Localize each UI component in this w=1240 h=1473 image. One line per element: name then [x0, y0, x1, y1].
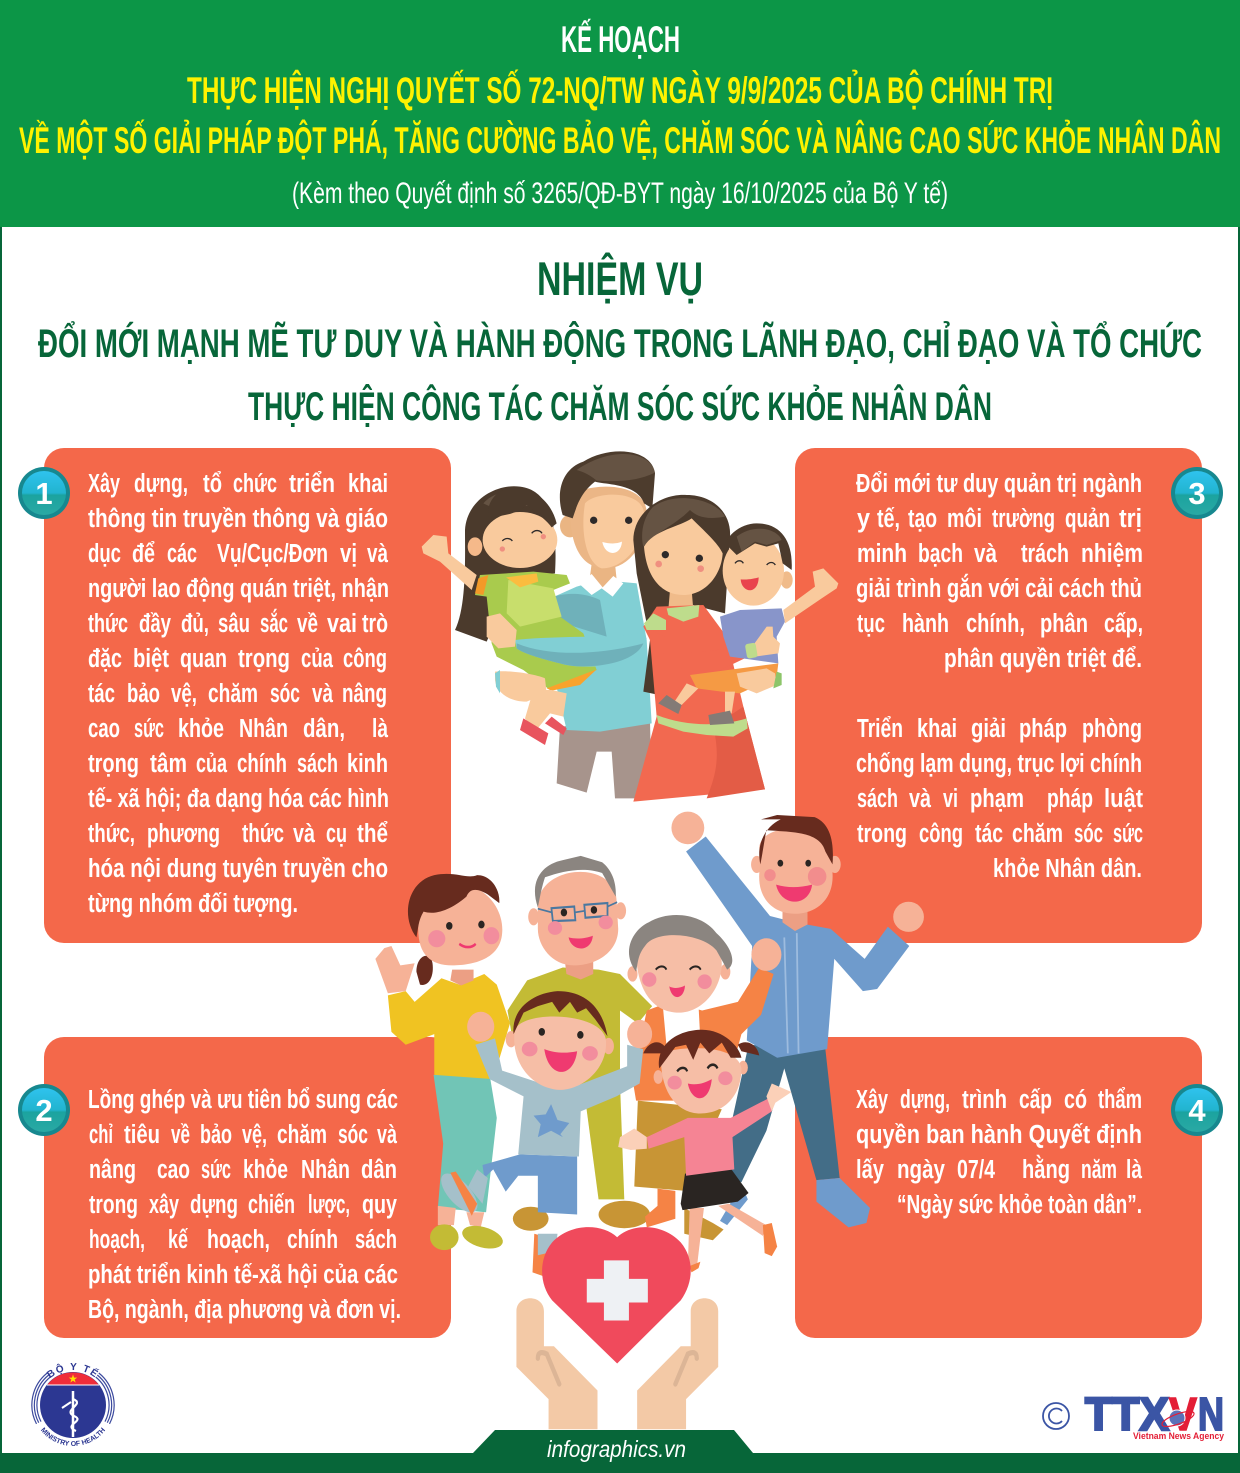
boy — [658, 523, 838, 725]
panel 2 text: sóc — [338, 1121, 368, 1149]
panel 3 text: pháp — [1047, 785, 1093, 813]
panel 2 text: nâng — [89, 1156, 136, 1184]
logo: TTXVN with copyright: Vietnam News Agency — [1133, 1431, 1224, 1441]
panel 4 text: Xây — [856, 1086, 889, 1114]
illustration: family of four hugging — [422, 451, 838, 802]
panel 1 text: phương — [147, 820, 220, 848]
panel 1 text: nâng — [342, 680, 387, 708]
panel 1 text: để — [132, 540, 155, 568]
panel 1 text: Nhân — [239, 715, 288, 743]
panel 4 text: 07/4 — [957, 1156, 996, 1184]
panel 2 text: và — [377, 1121, 398, 1149]
heart with cross — [542, 1227, 691, 1363]
panel 3 text: phân — [1040, 610, 1088, 638]
panel 3 text: sóc — [1074, 820, 1103, 848]
panel 2 text: tiêu — [124, 1121, 160, 1149]
panel 3 text: giải — [971, 715, 1006, 743]
panel 1 text: và — [293, 820, 316, 848]
badge 4 — [1171, 1084, 1223, 1136]
panel 1 text: hóa nội dung tuyên truyền cho — [88, 855, 388, 883]
panel 1 text: thức — [242, 820, 284, 848]
panel 1 text: tế- xã hội; đa dạng hóa các hình — [88, 785, 389, 813]
panel 2 text: chính — [287, 1226, 338, 1254]
panel 3 text: phân quyền triệt để. — [944, 645, 1142, 673]
logo top text: BỘ Y TẾ — [46, 1363, 100, 1378]
panel 1 text: về — [297, 610, 318, 638]
panel 1 text: sức — [134, 715, 164, 743]
panel 1 text: đặc — [88, 645, 122, 673]
panel 2 text: vệ, — [242, 1121, 267, 1149]
subtitle: decision reference: (Kèm theo Quyết định số 3265/QĐ-BYT ngày 16/10/2025 của Bộ Y tế) — [292, 177, 948, 210]
logo: TTXVN with copyright: TTX — [1085, 1388, 1169, 1440]
panel 2 text: chiến — [248, 1191, 295, 1219]
panel 2 text: khỏe — [243, 1156, 288, 1184]
panel 1 text: cao — [88, 715, 120, 743]
panel 1 text: sóc — [270, 680, 300, 708]
panel 3 text: luật — [1104, 785, 1143, 813]
panel 3 text: tục — [857, 610, 885, 638]
panel 2 text: chăm — [277, 1121, 327, 1149]
panel 1 — [44, 448, 451, 943]
panel 2 text: dựng — [190, 1191, 238, 1219]
panel 2 text: bảo — [200, 1121, 232, 1149]
panel 3 — [795, 448, 1202, 943]
panel 1 text: các — [167, 540, 197, 568]
grandmother — [627, 915, 781, 1240]
panel 3 text: công — [919, 820, 963, 848]
heading: plan: KẾ HOẠCH — [561, 19, 680, 60]
badge 3: 3 — [1188, 476, 1206, 511]
panel 3 text: và — [974, 540, 998, 568]
panel 1 text: Vụ/Cục/Đơn — [217, 540, 328, 568]
panel 3 text: chăm — [1012, 820, 1063, 848]
panel 1 text: chính — [237, 750, 287, 778]
panel 1 text: chăm — [208, 680, 258, 708]
panel 3 text: khai — [917, 715, 957, 743]
panel 2 text: chỉ — [89, 1121, 113, 1149]
panel 3 text: minh — [857, 540, 907, 568]
panel 3 text: tác — [975, 820, 1003, 848]
panel 2 text: quy — [362, 1191, 398, 1219]
panel 4 text: hằng — [1022, 1154, 1070, 1184]
panel 1 text: vị — [340, 540, 357, 568]
panel 1 text: của — [196, 750, 228, 778]
panel 3 text: tạo — [908, 505, 937, 533]
panel 3 text — [856, 470, 1143, 883]
panel 3 text: cấp, — [1104, 610, 1143, 638]
mother — [375, 874, 510, 1252]
logo: TTXVN with copyright: N — [1198, 1388, 1224, 1440]
section title — [38, 252, 1202, 429]
panel 2 text: sức — [201, 1156, 231, 1184]
panel 3 text: phòng — [1082, 715, 1142, 743]
illustration: three-generation family — [375, 812, 924, 1429]
panel 1 text: dựng, — [134, 470, 188, 498]
panel 3 text: pháp — [1019, 715, 1067, 743]
panel 1 text: thể — [357, 820, 388, 848]
panel 1 text: thức — [88, 610, 128, 638]
panel 2 text: về — [171, 1121, 190, 1149]
panel 4 text: năm — [1081, 1156, 1117, 1184]
panel 3 text: Triển — [857, 715, 903, 743]
panel 4 text: là — [1126, 1156, 1143, 1184]
panel 3 text: tế, — [877, 505, 900, 533]
footer bar — [0, 1430, 1240, 1473]
badge 3 — [1171, 467, 1223, 519]
panel 1 text: tâm — [150, 750, 187, 778]
logo: TTXVN with copyright: V — [1169, 1388, 1197, 1440]
panel 1 text: sâu — [218, 610, 250, 638]
panel 1 text: chức — [233, 470, 277, 498]
panel 4 text: lấy — [856, 1156, 885, 1184]
panel 2 text: kế — [168, 1226, 189, 1254]
panel 3 text: quản — [1065, 505, 1110, 533]
panel 4 — [795, 1037, 1202, 1338]
badge 4: 4 — [1188, 1093, 1206, 1128]
panel 2 text: sách — [355, 1226, 397, 1254]
footer site name: infographics.vn — [547, 1436, 686, 1462]
badge 1: 1 — [35, 476, 53, 511]
panel 3 text: trách — [1021, 540, 1069, 568]
panel 2 text — [88, 1086, 401, 1324]
caring hands — [516, 1298, 718, 1429]
panel 3 text: y — [857, 505, 871, 533]
panel 3 text: Đổi mới tư duy quản trị ngành — [856, 470, 1142, 498]
panel 3 text: môi — [947, 505, 982, 533]
father — [671, 812, 924, 1227]
logo: Ministry of Health — [31, 1363, 115, 1446]
panel 1 text: trọng — [88, 750, 139, 778]
panel 1 text: thức, — [88, 820, 135, 848]
panel 3 text: phạm — [970, 785, 1024, 813]
panel 4 text: thẩm — [1098, 1086, 1142, 1114]
panel 2 — [44, 1037, 451, 1338]
panel 3 text: chống lạm dụng, trục lợi chính — [856, 750, 1142, 778]
panel 1 text: triển — [289, 470, 335, 498]
panel 2 text: phát triển kinh tế-xã hội của các — [88, 1261, 398, 1289]
panel 1 text: tác — [88, 680, 115, 708]
panel 1 text: khỏe — [178, 715, 224, 743]
panel 1 text: bảo — [127, 680, 160, 708]
panel 4 text — [856, 1086, 1143, 1219]
title: task: NHIỆM VỤ — [537, 252, 703, 305]
girl — [618, 1030, 791, 1272]
panel 1 text: cụ — [326, 820, 347, 848]
copyright symbol — [1043, 1403, 1069, 1429]
panel 2 text: Nhân — [301, 1156, 350, 1184]
panel 3 text: hành — [902, 610, 949, 638]
panel 3 text: sức — [1113, 820, 1143, 848]
panel 1 text: và — [312, 680, 334, 708]
panel 2 text: xây — [149, 1191, 180, 1219]
panel 1 text: đầy — [139, 610, 172, 638]
badge 1 — [18, 467, 70, 519]
panel 3 text: nhiệm — [1081, 540, 1143, 568]
logo: Ministry of Health: ★ — [68, 1374, 78, 1384]
panel 2 text: Lồng ghép và ưu tiên bổ sung các — [88, 1086, 398, 1114]
panel 2 text: lược, — [308, 1191, 350, 1219]
panel 1 text: Xây — [88, 470, 121, 498]
man — [547, 451, 655, 798]
panel 1 text: thông tin truyền thông và giáo — [88, 505, 388, 533]
panel 1 text: đủ, — [181, 610, 209, 638]
panel 4 text: “Ngày sức khỏe toàn dân”. — [897, 1191, 1142, 1219]
panel 1 text: vai — [327, 610, 357, 638]
woman — [633, 495, 765, 802]
panel 1 text: người lao động quán triệt, nhận — [88, 575, 389, 603]
panel 1 text: dân, — [303, 715, 345, 743]
panel 1 text: dục — [88, 540, 121, 568]
panel 3 text: trong — [857, 820, 907, 848]
panel 4 text: có — [1064, 1086, 1087, 1114]
grandfather — [507, 856, 652, 1231]
panel 1 text: sắc — [260, 608, 288, 638]
panel 1 text: sách — [297, 750, 338, 778]
panel 1 text: công — [343, 645, 387, 673]
panel 2 text: cao — [157, 1156, 190, 1184]
panel 3 text: và — [909, 785, 932, 813]
panel 3 text: vi — [943, 785, 958, 813]
panel 3 text: khỏe Nhân dân. — [993, 855, 1142, 883]
badge 2: 2 — [35, 1093, 53, 1128]
panel 1 text: quan — [180, 645, 227, 673]
panel 4 text: ngày — [897, 1156, 946, 1184]
panel 1 text: từng nhóm đối tượng. — [88, 890, 298, 918]
panel 1 text: vệ, — [171, 680, 197, 708]
panel 1 text: tổ — [203, 470, 222, 498]
panel 2 text: hoạch, — [207, 1226, 270, 1254]
panel 4 text: quyền ban hành Quyết định — [856, 1121, 1142, 1149]
panel 4 text: cấp — [1019, 1086, 1052, 1114]
panel 3 text: chính, — [966, 610, 1025, 638]
panel 1 text: là — [372, 715, 389, 743]
panel 1 text: và — [367, 540, 389, 568]
boy — [436, 991, 652, 1277]
badge 2 — [18, 1084, 70, 1136]
panel 4 text: trình — [962, 1086, 1007, 1114]
panel 1 text: kinh — [347, 750, 388, 778]
panel 3 text: trị — [1119, 505, 1142, 533]
header banner — [0, 0, 1240, 227]
panel 2 text: trong — [89, 1191, 138, 1219]
logo bottom text: MINISTRY OF HEALTH — [40, 1427, 106, 1446]
panel 1 text: khai — [348, 470, 388, 498]
panel 3 text: giải trình gắn với cải cách thủ — [856, 573, 1142, 603]
panel 1 text — [88, 470, 389, 918]
panel 2 text: hoạch, — [89, 1226, 145, 1254]
panel 1 text: của — [301, 645, 334, 673]
panel 2 text: Bộ, ngành, địa phương và đơn vị. — [88, 1296, 401, 1324]
panel 3 text: sách — [857, 785, 898, 813]
panel 3 text: trường — [992, 505, 1055, 533]
panel 1 text: trò — [362, 610, 388, 638]
man's arm and girl — [422, 486, 647, 745]
logo: TTXVN with copyright — [1043, 1388, 1224, 1441]
panel 4 text: dựng, — [900, 1086, 950, 1114]
panel 3 text: bạch — [918, 540, 963, 568]
panel 2 text: dân — [361, 1156, 397, 1184]
panel 1 text: biệt — [133, 645, 169, 673]
panel 1 text: trọng — [238, 645, 290, 673]
